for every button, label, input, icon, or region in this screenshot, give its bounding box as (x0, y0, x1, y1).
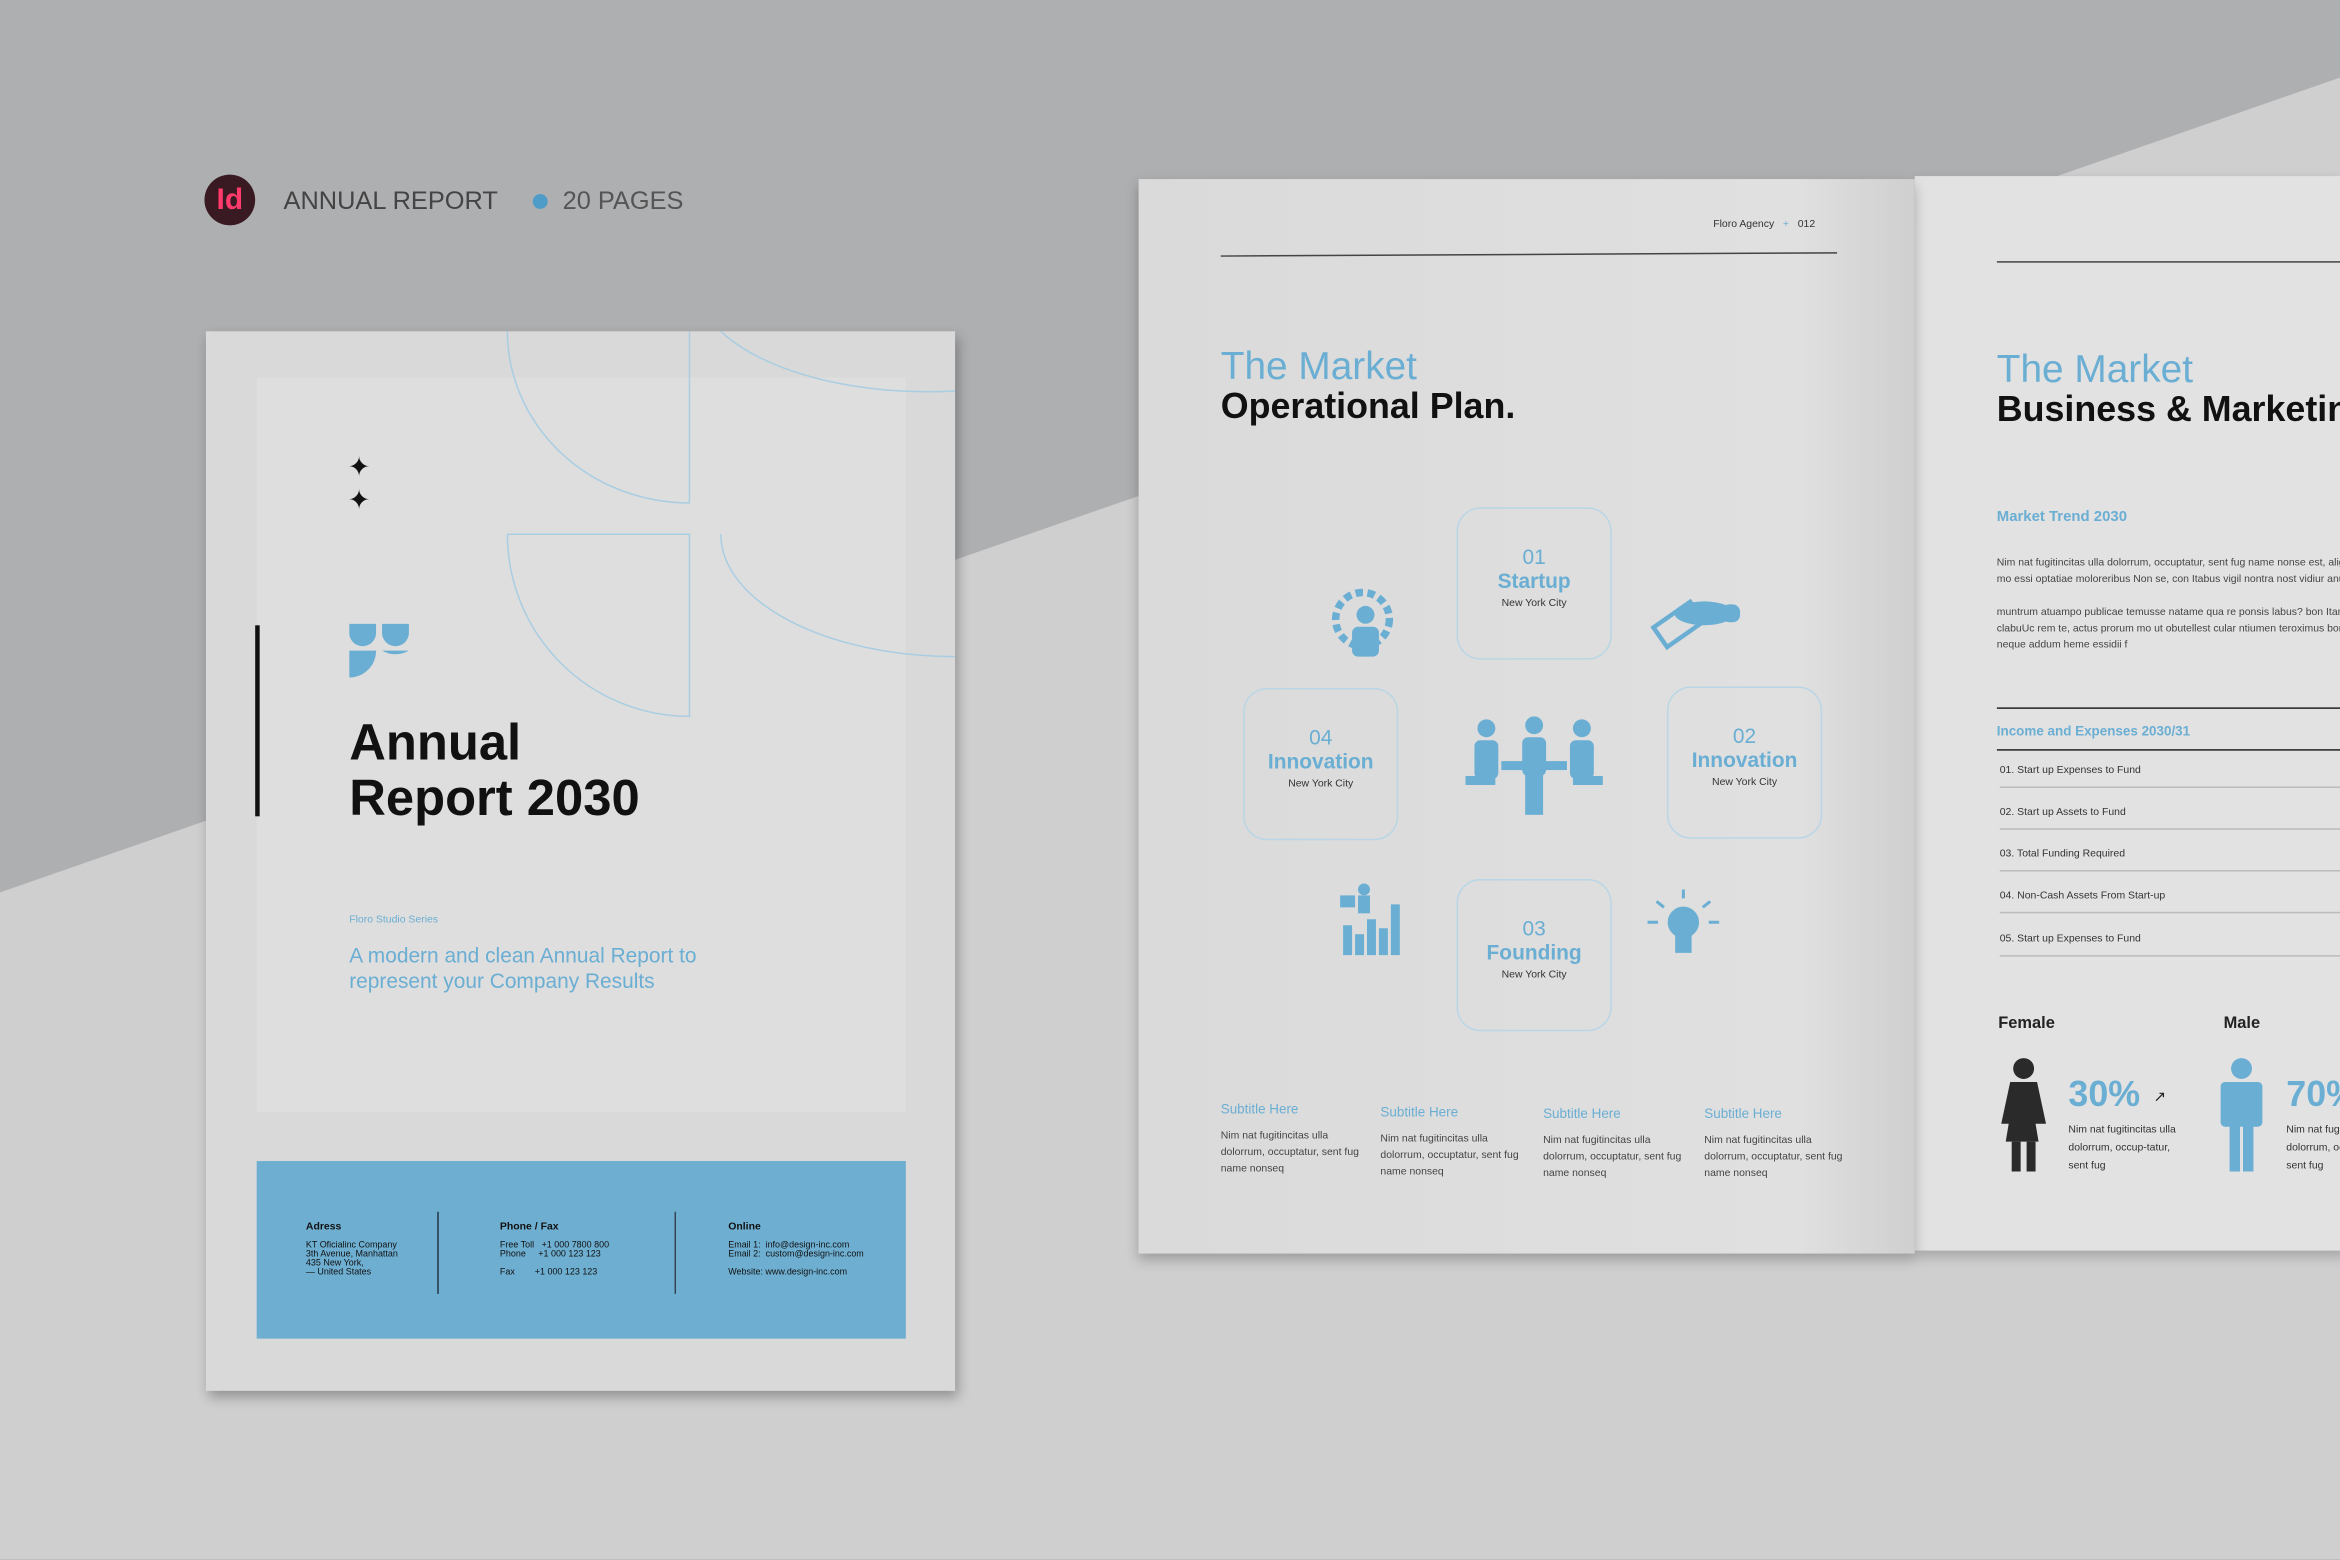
address: KT Oficialinc Company (306, 1242, 397, 1251)
icon: male (2220, 1058, 2262, 1172)
left heading: Operational Plan. (1221, 387, 1515, 427)
cover page (206, 331, 955, 1391)
bubble 03: Founding (1487, 940, 1582, 964)
table rows: 05. Start up Expenses to Fund (2000, 934, 2141, 945)
cover title: Annual (349, 715, 521, 772)
bubble 01: 01 (1523, 545, 1546, 569)
subtitle columns: Nim nat fugitincitas ulla dolorrum, occuptatur, sent fug name nonseq (1221, 1131, 1359, 1174)
header: app badge and labels (204, 174, 683, 226)
diagram: operational plan (1243, 507, 1822, 1032)
spread: right page (1915, 176, 2340, 1251)
contact bar (257, 1161, 906, 1339)
address: 3th Avenue, Manhattan (306, 1251, 398, 1260)
phone: Phone / Fax (500, 1222, 559, 1233)
label: pages: 20 PAGES (563, 187, 683, 215)
subtitle columns: Nim nat fugitincitas ulla dolorrum, occuptatur, sent fug name nonseq (1380, 1134, 1519, 1177)
subtitle columns: Nim nat fugitincitas ulla dolorrum, occuptatur, sent fug name nonseq (1704, 1136, 1842, 1179)
phone: Free Toll +1 000 7800 800 (500, 1242, 609, 1251)
series label: Floro Studio Series (349, 915, 438, 925)
bubble 01: Startup (1498, 569, 1571, 592)
bubble 03 (1457, 879, 1612, 1031)
income table: Income and Expenses 2030/31 (1997, 724, 2190, 739)
address: 435 New York, (306, 1260, 364, 1268)
online: Online (728, 1222, 761, 1233)
cover subtitle: represent your Company Results (349, 969, 655, 992)
icon: gear person (1332, 588, 1394, 657)
left heading (1221, 343, 1515, 427)
bubble 04: New York City (1288, 779, 1353, 789)
logo (349, 624, 409, 678)
gender stats: ↗ (2153, 1089, 2166, 1106)
online: Website: www.design-inc.com (728, 1268, 847, 1277)
phone (500, 1222, 609, 1277)
right heading (1997, 346, 2340, 430)
bubble 04 (1243, 688, 1398, 840)
table rows: 03. Total Funding Required (2000, 849, 2125, 860)
icon: indesign (204, 175, 255, 225)
icon: meeting (1466, 716, 1603, 815)
right heading: The Market (1997, 346, 2193, 391)
table rows: 02. Start up Assets to Fund (2000, 807, 2126, 818)
table rows (2000, 766, 2340, 956)
icon: sparkles: ✦ (348, 485, 370, 515)
right page content (1996, 261, 2340, 751)
address: — United States (306, 1268, 371, 1277)
accent bar (255, 625, 260, 816)
subtitle columns: Nim nat fugitincitas ulla dolorrum, occuptatur, sent fug name nonseq (1543, 1136, 1681, 1179)
gender stats: Male (2224, 1015, 2260, 1033)
subtitle columns: Subtitle Here (1221, 1101, 1298, 1116)
phone: Fax +1 000 123 123 (500, 1268, 597, 1277)
cover title: Report 2030 (349, 770, 640, 827)
subtitle columns (1221, 1101, 1842, 1179)
icon: indesign: Id (217, 184, 243, 216)
icon: sparkles (348, 452, 370, 515)
icon: bulb (1648, 890, 1720, 953)
table rows: 04. Non-Cash Assets From Start-up (2000, 891, 2165, 901)
gender stats: Nim nat fugitincitas ulla dolorrum, occup-tatur, sent fug (2068, 1125, 2176, 1171)
address: Adress (306, 1222, 341, 1233)
spread: left page (1139, 179, 1915, 1254)
icon: female (2001, 1058, 2046, 1172)
cover subtitle: A modern and clean Annual Report to (349, 943, 697, 967)
market trend: Market Trend 2030 (1997, 509, 2127, 525)
icon: chart person (1340, 884, 1400, 956)
page header: Floro Agency + 012 (1713, 219, 1815, 230)
address (306, 1222, 398, 1277)
cover subtitle (349, 943, 697, 992)
gender stats (1998, 1015, 2340, 1172)
bubble 04: Innovation (1268, 749, 1374, 773)
bubble 03: New York City (1502, 970, 1567, 980)
bubble 01 (1457, 507, 1612, 660)
gender stats: Female (1998, 1015, 2055, 1033)
bubble 02: New York City (1712, 778, 1777, 788)
bubble 02 (1667, 686, 1822, 839)
subtitle columns: Subtitle Here (1380, 1104, 1458, 1119)
left heading: The Market (1221, 343, 1417, 388)
bubble 02: 02 (1733, 724, 1756, 748)
bubble 03: 03 (1523, 916, 1546, 940)
icon: hand money (1650, 598, 1740, 650)
subtitle columns: Subtitle Here (1543, 1106, 1621, 1121)
subtitle columns: Subtitle Here (1704, 1106, 1782, 1121)
online (728, 1222, 864, 1277)
bubble 04: 04 (1309, 725, 1332, 749)
label: annual report: ANNUAL REPORT (284, 187, 498, 215)
icon: sparkles: ✦ (348, 452, 370, 482)
gender stats: 30% (2068, 1074, 2140, 1115)
online: Email 2: custom@design-inc.com (728, 1251, 864, 1260)
cover decorative arcs (506, 331, 955, 718)
bubble 01: New York City (1502, 598, 1567, 609)
phone: Phone +1 000 123 123 (500, 1251, 601, 1260)
table rows: 01. Start up Expenses to Fund (2000, 766, 2141, 776)
bubble 02: Innovation (1692, 748, 1797, 772)
online: Email 1: info@design-inc.com (728, 1242, 849, 1251)
cover title (349, 715, 640, 827)
